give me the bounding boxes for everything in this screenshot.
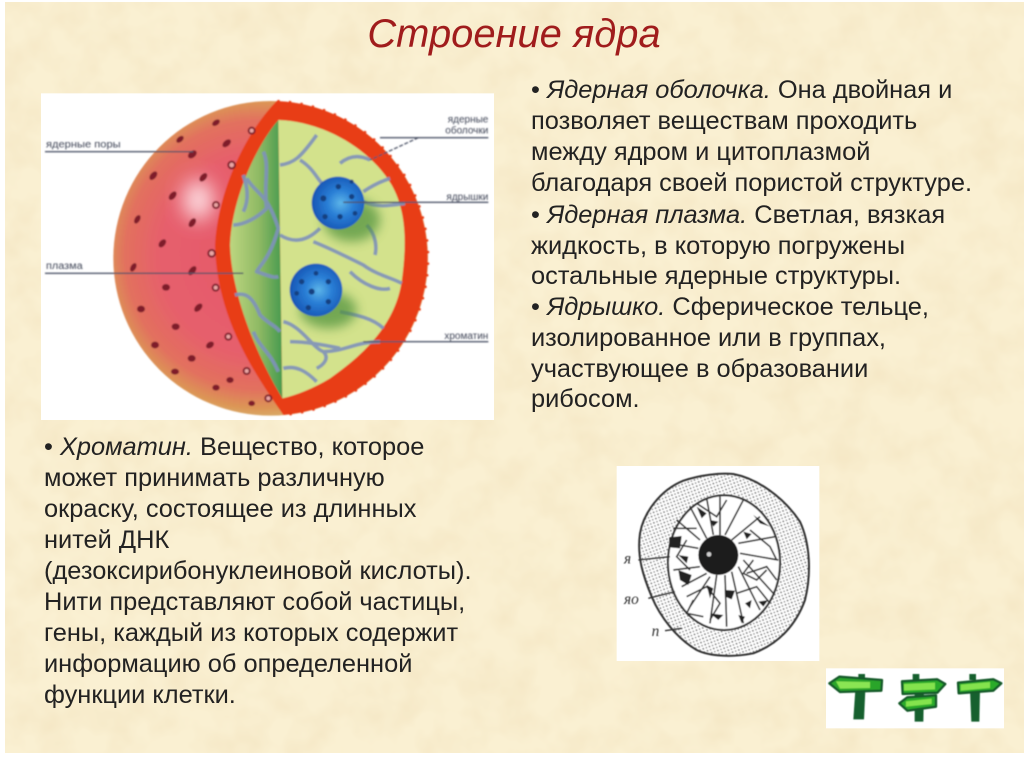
panel: white diagram backing (41, 93, 494, 420)
text block: nuclear envelope, plasma, nucleolus: • Ядрышко. Сферическое тельце, (531, 293, 929, 321)
sphere highlight (183, 180, 213, 220)
text block: chromatin (44, 433, 472, 709)
panel: white backing (826, 668, 1004, 728)
hollow pores on rim (208, 128, 271, 401)
labels and pointers: яо (623, 591, 639, 608)
labels: ядерные (448, 114, 489, 125)
nucleus (668, 495, 780, 630)
text block: chromatin: нитей ДНК (44, 526, 169, 554)
text block: nuclear envelope, plasma, nucleolus: изолированное или в группах, (531, 324, 886, 352)
icon: signpost middle (899, 674, 945, 722)
text block: nuclear envelope, plasma, nucleolus: позволяет веществам проходить (531, 107, 917, 135)
labels and pointers (623, 550, 682, 640)
labels and pointers: п (652, 623, 660, 640)
labels: ядрышки (446, 192, 488, 203)
text block: chromatin: функции клетки. (44, 681, 236, 709)
chromatin clumps (669, 507, 770, 623)
nuclear envelope: red rim (215, 101, 428, 415)
nucleolus (698, 535, 738, 575)
text block: chromatin: окраску, состоящее из длинных (44, 495, 417, 523)
sphere outer surface (113, 101, 428, 416)
text block: chromatin: • Хроматин. Вещество, которое (44, 433, 424, 461)
nucleolus: upper (312, 177, 380, 242)
labels and pointers: я (623, 550, 631, 567)
chromatin net (670, 497, 778, 627)
panel: white backing (617, 466, 819, 661)
nucleolus: lower (290, 264, 357, 328)
labels: оболочки (445, 125, 488, 137)
icon: signpost left (829, 674, 882, 719)
labels: хроматин (444, 331, 488, 342)
leader lines (45, 138, 488, 342)
text block: nuclear envelope, plasma, nucleolus: между ядром и цитоплазмой (531, 138, 870, 166)
text block: nuclear envelope, plasma, nucleolus: благодаря своей пористой структуре. (531, 169, 972, 197)
text block: nuclear envelope, plasma, nucleolus: рибосом. (531, 385, 640, 413)
text block: nuclear envelope, plasma, nucleolus: жидкость, в которую погружены (531, 232, 905, 260)
diagram: nucleus structure (41, 93, 494, 420)
icon: signpost right (958, 674, 1001, 722)
title: Строение ядра (367, 12, 661, 56)
text block: chromatin: информацию об определенной (44, 650, 412, 678)
nuclear plasma: right inner face (278, 120, 405, 398)
nuclear plasma: left inner face (230, 120, 282, 398)
text block: chromatin: может принимать различную (44, 464, 385, 492)
text block: nuclear envelope, plasma, nucleolus: остальные ядерные структуры. (531, 262, 901, 290)
text block: nuclear envelope, plasma, nucleolus (531, 76, 972, 413)
text block: chromatin: гены, каждый из которых содержит (44, 619, 458, 647)
labels: плазма (46, 261, 83, 272)
text block: nuclear envelope, plasma, nucleolus: участвующее в образовании (531, 355, 868, 383)
labels (46, 114, 489, 342)
cell outline with stippled cytoplasm (639, 474, 809, 656)
diagram: cell micrograph drawing (617, 466, 819, 661)
nuclear pores (129, 118, 255, 406)
text block: nuclear envelope, plasma, nucleolus: • Ядерная оболочка. Она двойная и (531, 76, 952, 104)
text block: chromatin: (дезоксирибонуклеиновой кислоты). (44, 557, 472, 585)
labels: ядерные поры (46, 140, 121, 151)
chromatin network (233, 135, 405, 382)
text block: nuclear envelope, plasma, nucleolus: • Ядерная плазма. Светлая, вязкая (531, 201, 945, 229)
text block: chromatin: Нити представляют собой частицы, (44, 588, 465, 616)
icons: green signposts (826, 668, 1004, 728)
